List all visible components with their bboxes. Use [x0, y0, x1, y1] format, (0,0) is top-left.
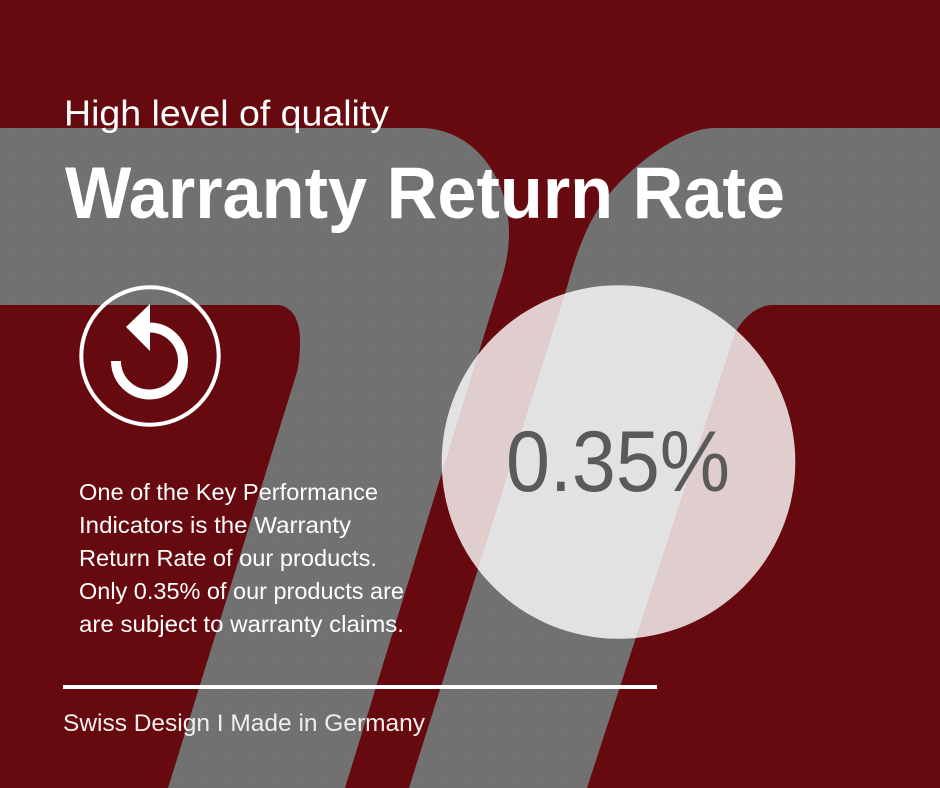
footer tagline: Swiss Design I Made in Germany	[63, 710, 425, 737]
body text: are subject to warranty claims.	[79, 611, 404, 637]
background logo shape: left	[0, 128, 509, 788]
stat circle	[442, 285, 795, 639]
body text: One of the Key Performance	[79, 479, 378, 505]
subheading: High level of quality	[64, 92, 389, 134]
body text	[79, 479, 404, 637]
title: Warranty Return Rate	[65, 153, 785, 234]
body text: Return Rate of our products.	[79, 545, 377, 571]
stat value: 0.35%	[506, 414, 730, 510]
icon: return arrow in circle	[81, 287, 219, 425]
body text: Only 0.35% of our products are	[79, 578, 404, 604]
background logo shape: right	[409, 128, 940, 788]
body text: Indicators is the Warranty	[79, 512, 352, 538]
